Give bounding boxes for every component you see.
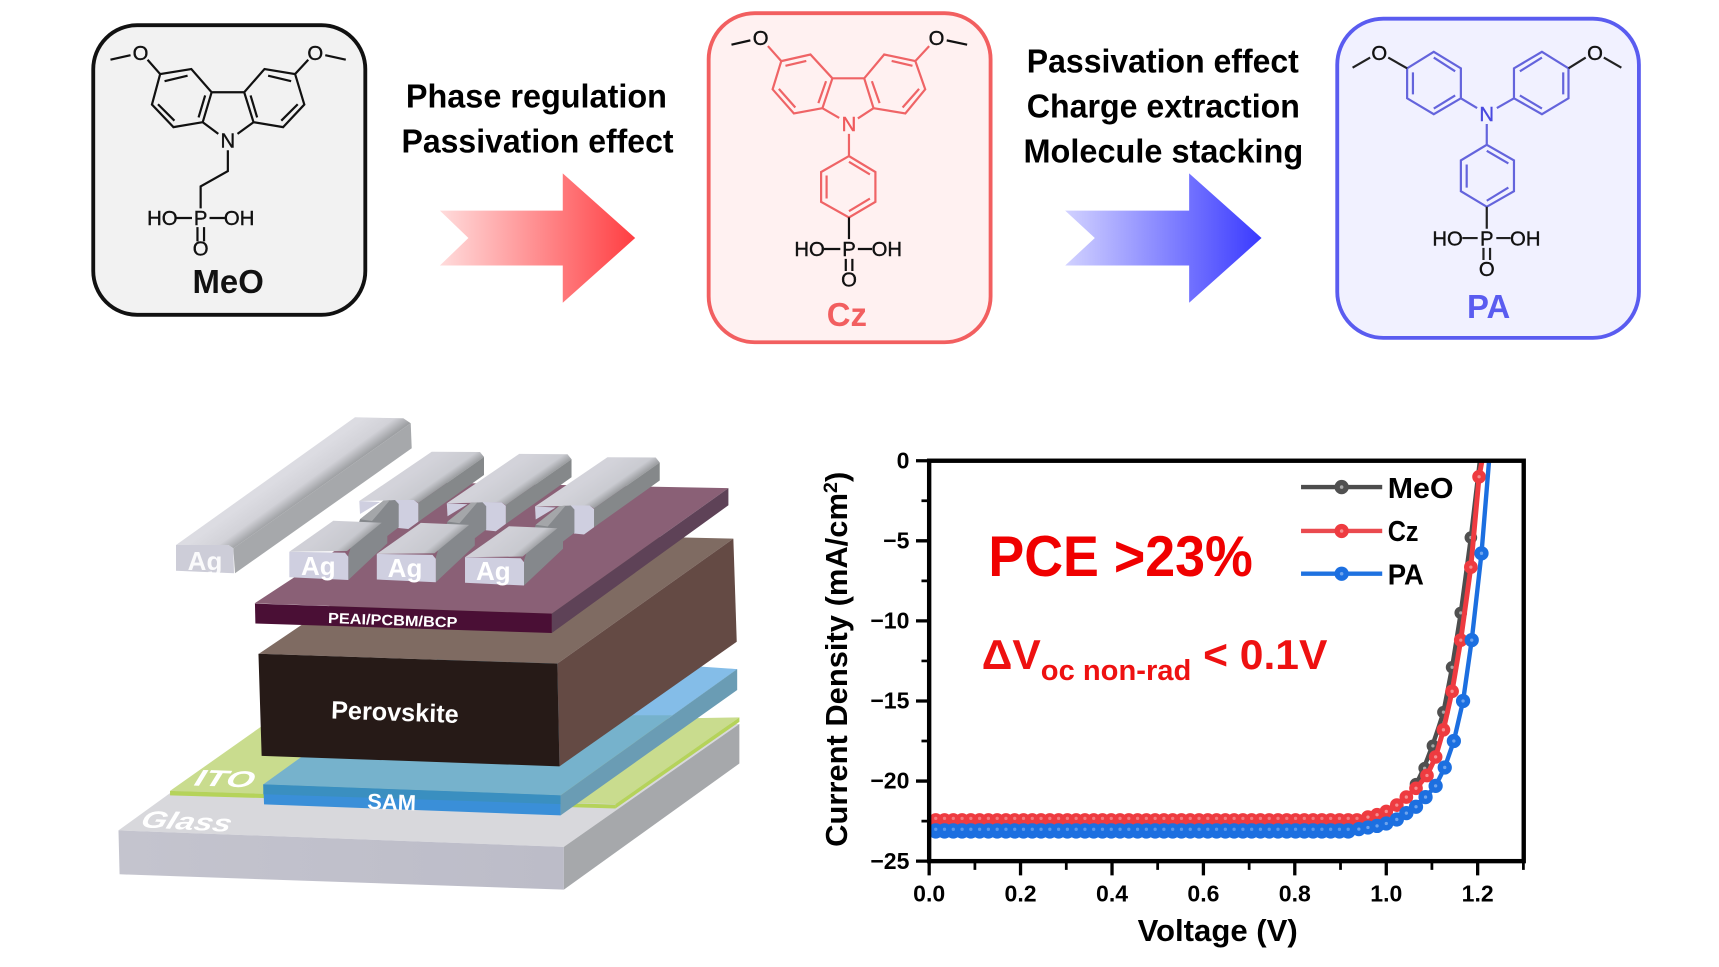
- layer: perovskite: Perovskite: [331, 697, 459, 729]
- Cz structure: P: [842, 239, 856, 261]
- x axis tick labels: 1.2: [1462, 881, 1494, 907]
- curve: Cz: [934, 461, 1482, 820]
- y axis tick labels: −25: [870, 848, 910, 874]
- electrode: Ag pad 3: [465, 457, 660, 586]
- MeO structure: [110, 43, 346, 261]
- y axis tick labels: −10: [870, 608, 909, 634]
- legend: MeO: [1388, 473, 1454, 505]
- callout: voltage loss: oc non-rad: [1041, 655, 1191, 687]
- layer: ITO: ITO: [192, 765, 259, 792]
- layer: glass: [118, 719, 739, 890]
- legend: PA: [1388, 560, 1424, 592]
- x axis tick labels: 0.0: [913, 881, 945, 907]
- y axis tick labels: −5: [883, 527, 910, 553]
- PA structure: P: [1480, 229, 1494, 251]
- panel: Cz molecule: [709, 13, 991, 342]
- plot frame and ticks: [916, 461, 1524, 875]
- y axis title: 2: [820, 482, 842, 493]
- electrode: Ag pad 1: [289, 452, 484, 581]
- heading: passivation, extraction and stacking: Passivation effect: [1027, 42, 1299, 79]
- Cz structure: O: [929, 28, 944, 50]
- chart: J-V curves: [819, 447, 1524, 948]
- legend: Cz: [1388, 516, 1418, 548]
- heading: phase regulation and passivation: Passivation effect: [402, 122, 674, 159]
- Cz structure: OH: [872, 239, 902, 261]
- PA structure: O: [1479, 259, 1495, 281]
- panel: MeO molecule: [93, 25, 365, 315]
- x axis tick labels: 1.0: [1370, 881, 1402, 907]
- PA label: PA: [1467, 288, 1510, 325]
- y axis title: ): [819, 472, 854, 482]
- PA structure: HO: [1432, 229, 1463, 251]
- MeO structure: HO: [147, 208, 178, 230]
- y axis tick labels: −15: [870, 688, 910, 714]
- arrow: blue: [1065, 173, 1262, 303]
- electrode: Ag pad 1: Ag: [301, 551, 336, 581]
- MeO structure: O: [193, 239, 209, 261]
- layer: perovskite: [258, 532, 737, 766]
- layer: PEAI/PCBM/BCP: PEAI/PCBM/BCP: [328, 611, 458, 632]
- layer: ITO: [170, 717, 739, 808]
- callout: voltage loss: ΔV: [982, 631, 1040, 678]
- y axis title: Current Density (mA/cm: [819, 495, 854, 847]
- Cz structure: HO: [794, 239, 825, 261]
- MeO structure: OH: [224, 208, 254, 230]
- Cz structure: N: [842, 114, 856, 136]
- electrode: Ag pad 3: Ag: [476, 556, 511, 586]
- Cz label: Cz: [827, 296, 867, 333]
- callout: voltage loss: < 0.1V: [1191, 631, 1328, 678]
- MeO structure: P: [194, 208, 207, 230]
- x axis tick labels: 0.6: [1187, 881, 1219, 907]
- PA structure: O: [1587, 43, 1603, 65]
- electrode: detached Ag bar: Ag: [188, 546, 222, 576]
- PA structure: O: [1371, 43, 1387, 65]
- x axis tick labels: 0.8: [1279, 881, 1311, 907]
- MeO structure: O: [133, 43, 148, 65]
- panel: device stack: [118, 417, 739, 890]
- heading: passivation, extraction and stacking: Molecule stacking: [1024, 132, 1303, 169]
- MeO label: MeO: [193, 263, 264, 300]
- PA structure: [1353, 43, 1621, 281]
- Cz structure: O: [753, 28, 769, 50]
- heading: passivation, extraction and stacking: [1024, 42, 1303, 169]
- y axis tick labels: [870, 447, 910, 874]
- arrow: red: [440, 173, 635, 303]
- electrode: detached Ag bar: [176, 417, 412, 576]
- heading: phase regulation and passivation: Phase regulation: [406, 78, 667, 115]
- panel: PA molecule: [1337, 19, 1639, 338]
- curve: PA: [934, 461, 1489, 831]
- layer: glass: Glass: [137, 807, 236, 838]
- x axis tick labels: [913, 881, 1494, 907]
- PA structure: N: [1479, 104, 1494, 126]
- x axis title: Voltage (V): [1138, 913, 1298, 948]
- electrode: Ag pad 2: Ag: [388, 553, 422, 583]
- MeO structure: O: [307, 43, 323, 65]
- curve: MeO: [1416, 461, 1480, 784]
- legend: [1301, 473, 1454, 592]
- Cz structure: [731, 28, 967, 291]
- electrode: Ag pad 2: [377, 454, 572, 583]
- x axis tick labels: 0.2: [1005, 881, 1037, 907]
- layer: SAM: [263, 658, 737, 815]
- Cz structure: O: [841, 269, 857, 291]
- heading: passivation, extraction and stacking: Charge extraction: [1027, 87, 1300, 124]
- layer: PEAI/PCBM/BCP: [255, 483, 728, 633]
- callout: PCE: PCE >23%: [988, 525, 1253, 589]
- MeO structure: N: [221, 131, 235, 153]
- heading: phase regulation and passivation: [402, 78, 674, 159]
- layer: SAM: SAM: [367, 789, 416, 815]
- x axis tick labels: 0.4: [1096, 881, 1128, 907]
- y axis tick labels: −20: [870, 768, 909, 794]
- y axis tick labels: 0: [897, 447, 909, 473]
- PA structure: OH: [1510, 229, 1540, 251]
